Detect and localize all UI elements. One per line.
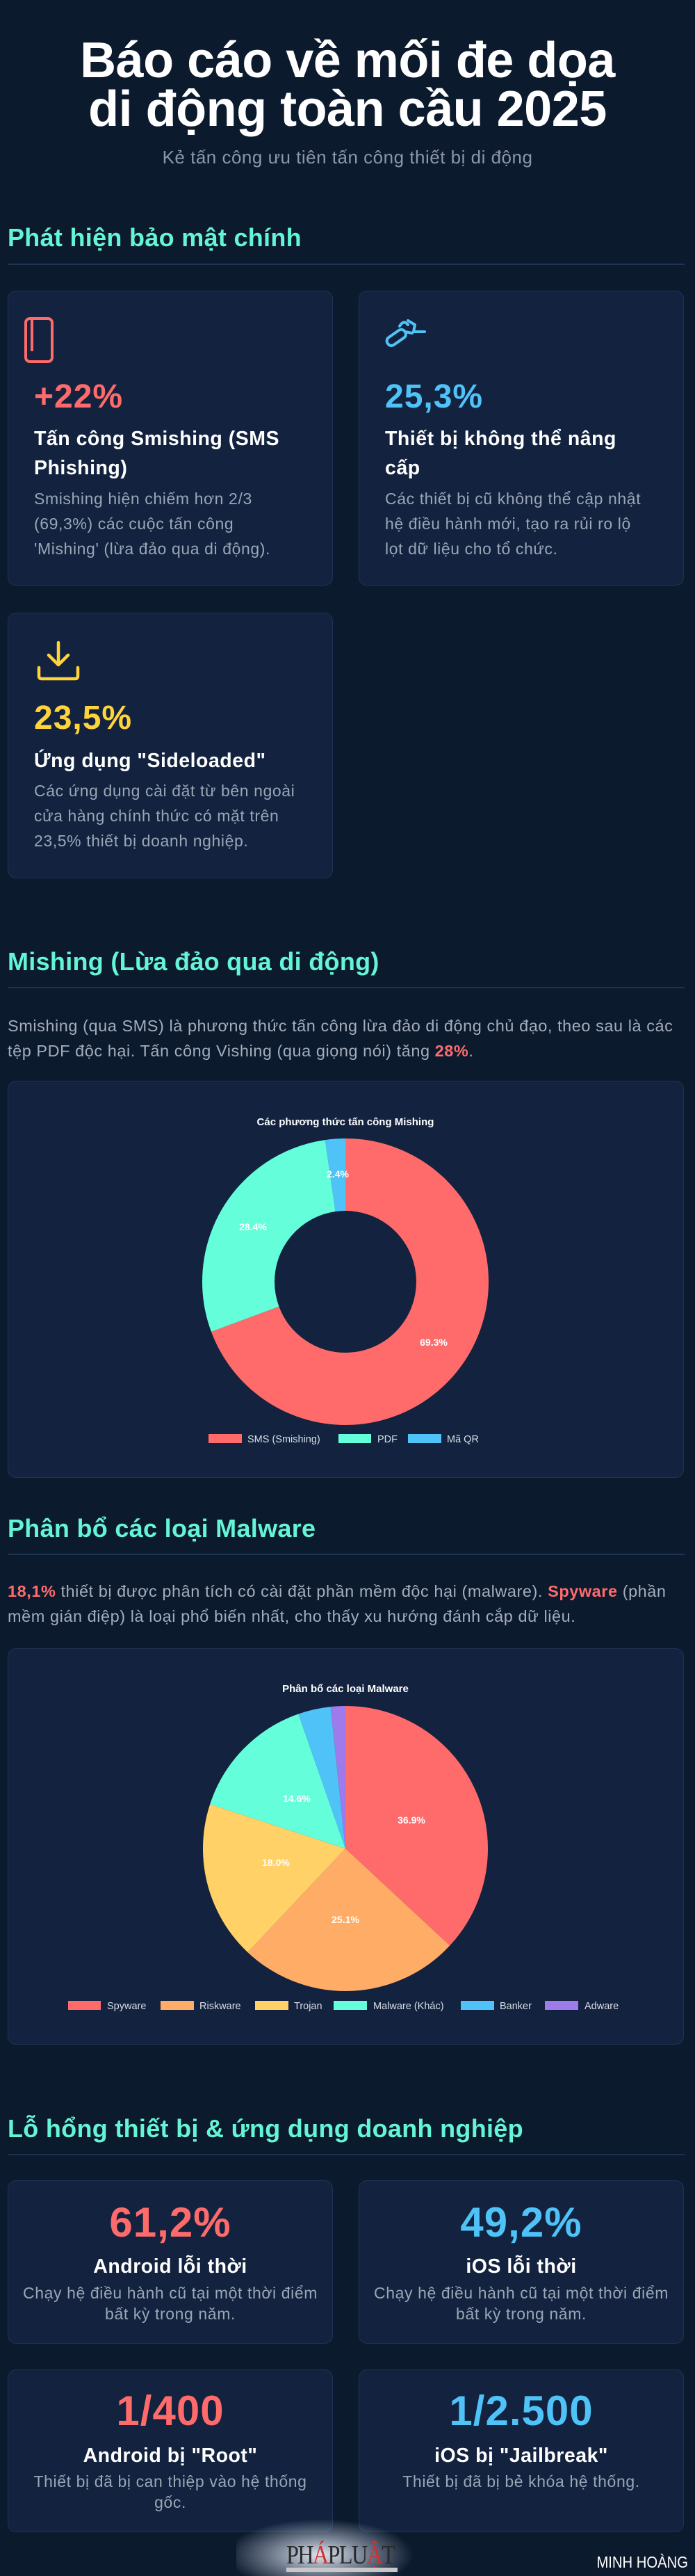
card description [374, 2284, 669, 2323]
card title: iOS lỗi thời [466, 2255, 577, 2278]
card description: Smishing hiện chiếm hơn 2/3 [34, 490, 252, 508]
value: 61,2% [109, 2199, 231, 2246]
card title: Android bị "Root" [83, 2445, 257, 2467]
card description: lọt dữ liệu cho tổ chức. [385, 540, 557, 558]
legend [68, 2001, 619, 2012]
legend: Riskware [199, 2001, 241, 2012]
card description [33, 2472, 307, 2511]
card description: hệ điều hành mới, tạo ra rủi ro lộ [385, 515, 631, 533]
legend [208, 1434, 479, 1445]
title: Báo cáo về mối đe dọa [80, 33, 615, 88]
legend: Adware [584, 2001, 619, 2012]
value: 1/2.500 [449, 2388, 594, 2434]
chart: mishing donut [202, 1116, 489, 1445]
card description [34, 782, 295, 850]
title [80, 33, 616, 137]
card description: bất kỳ trong năm. [456, 2305, 587, 2323]
pie labels: 25.1% [332, 1914, 359, 1925]
card: sideloaded apps [8, 613, 333, 878]
footer author: MINH HOÀNG [596, 2553, 688, 2571]
legend: Malware (Khác) [373, 2001, 444, 2012]
paragraph: mishing: Smishing (qua SMS) là phương thức tấn công lừa đảo di động chủ đạo, theo sau là các [8, 1017, 673, 1035]
heading: key findings: Phát hiện bảo mật chính [8, 223, 302, 252]
value: +22% [34, 378, 123, 415]
card title: Android lỗi thời [93, 2255, 247, 2278]
chart title: Phân bổ các loại Malware [282, 1683, 409, 1695]
card title: Ứng dụng "Sideloaded" [34, 750, 265, 772]
card: unpatchable devices [359, 291, 684, 586]
paragraph: mishing [8, 1017, 673, 1060]
card description: Các ứng dụng cài đặt từ bên ngoài [34, 782, 295, 800]
donut labels [239, 1168, 448, 1348]
value: 25,3% [385, 378, 483, 415]
card title: Tấn công Smishing (SMS [34, 428, 279, 450]
card title [34, 428, 279, 479]
card: iOS jailbreak [359, 2369, 684, 2532]
panel: malware chart [8, 1648, 684, 2045]
value: 1/400 [116, 2388, 224, 2434]
card title: Thiết bị không thể nâng [385, 428, 616, 450]
card title: iOS bị "Jailbreak" [434, 2445, 608, 2467]
card description: 'Mishing' (lừa đảo qua di động). [34, 540, 270, 558]
panel: mishing chart [8, 1081, 684, 1478]
footer logo [236, 2516, 445, 2576]
heading: mishing: Mishing (Lừa đảo qua di động) [8, 947, 379, 976]
card title: Phishing) [34, 457, 127, 479]
donut labels: 2.4% [327, 1168, 350, 1180]
chart: malware pie [68, 1683, 619, 2012]
legend: Trojan [294, 2001, 322, 2012]
card: android rooted [8, 2369, 333, 2532]
title: di động toàn cầu 2025 [88, 81, 607, 137]
legend: SMS (Smishing) [247, 1434, 320, 1445]
pie labels: 36.9% [398, 1814, 425, 1826]
subtitle: Kẻ tấn công ưu tiên tấn công thiết bị di động [163, 147, 532, 168]
card: iOS outdated [359, 2180, 684, 2344]
paragraph: mishing: tệp PDF độc hại. Tấn công Vishing (qua giọng nói) tăng 28%. [8, 1042, 473, 1060]
pie segments [274, 1778, 417, 1919]
footer logo: PHÁPLUẬT [286, 2541, 394, 2570]
legend: Banker [500, 2001, 532, 2012]
card description: Thiết bị đã bị bẻ khóa hệ thống. [402, 2472, 640, 2490]
card: smishing [8, 291, 333, 586]
paragraph: malware: mềm gián điệp) là loại phổ biến nhất, cho thấy xu hướng đánh cắp dữ liệu. [8, 1607, 575, 1625]
card description [23, 2284, 318, 2323]
card description: Chạy hệ điều hành cũ tại một thời điểm [374, 2284, 669, 2302]
icon: phone [24, 317, 54, 363]
card description: cửa hàng chính thức có mặt trên [34, 807, 279, 825]
card description [385, 490, 641, 558]
paragraph: malware: 18,1% thiết bị được phân tích có cài đặt phần mềm độc hại (malware). Spyware (phần [8, 1582, 667, 1600]
card description: 23,5% thiết bị doanh nghiệp. [34, 832, 248, 850]
paragraph: malware [8, 1582, 667, 1625]
pie labels: 18.0% [262, 1857, 290, 1868]
legend: Mã QR [447, 1434, 479, 1445]
legend: Spyware [107, 2001, 146, 2012]
value: 23,5% [34, 700, 132, 736]
donut segments [238, 1175, 452, 1389]
donut labels: 69.3% [420, 1337, 448, 1348]
card title [385, 428, 616, 479]
card description: bất kỳ trong năm. [105, 2305, 236, 2323]
pie labels: 14.6% [283, 1793, 311, 1804]
card description: Chạy hệ điều hành cũ tại một thời điểm [23, 2284, 318, 2302]
card: android outdated [8, 2180, 333, 2344]
icon: tool [385, 319, 426, 347]
pie labels [262, 1793, 425, 1925]
heading: malware: Phân bổ các loại Malware [8, 1514, 316, 1543]
donut labels: 28.4% [239, 1221, 267, 1232]
value: 49,2% [460, 2199, 582, 2246]
card description: (69,3%) các cuộc tấn công [34, 515, 234, 533]
heading: vulnerabilities: Lỗ hổng thiết bị & ứng dụng doanh nghiệp [8, 2114, 523, 2143]
card description: Các thiết bị cũ không thể cập nhật [385, 490, 641, 508]
card description: gốc. [154, 2493, 186, 2511]
icon: download [38, 641, 79, 680]
chart title: Các phương thức tấn công Mishing [257, 1116, 434, 1128]
card description: Thiết bị đã bị can thiệp vào hệ thống [33, 2472, 307, 2490]
card title: cấp [385, 457, 420, 479]
legend: PDF [377, 1434, 398, 1445]
card description [34, 490, 270, 558]
